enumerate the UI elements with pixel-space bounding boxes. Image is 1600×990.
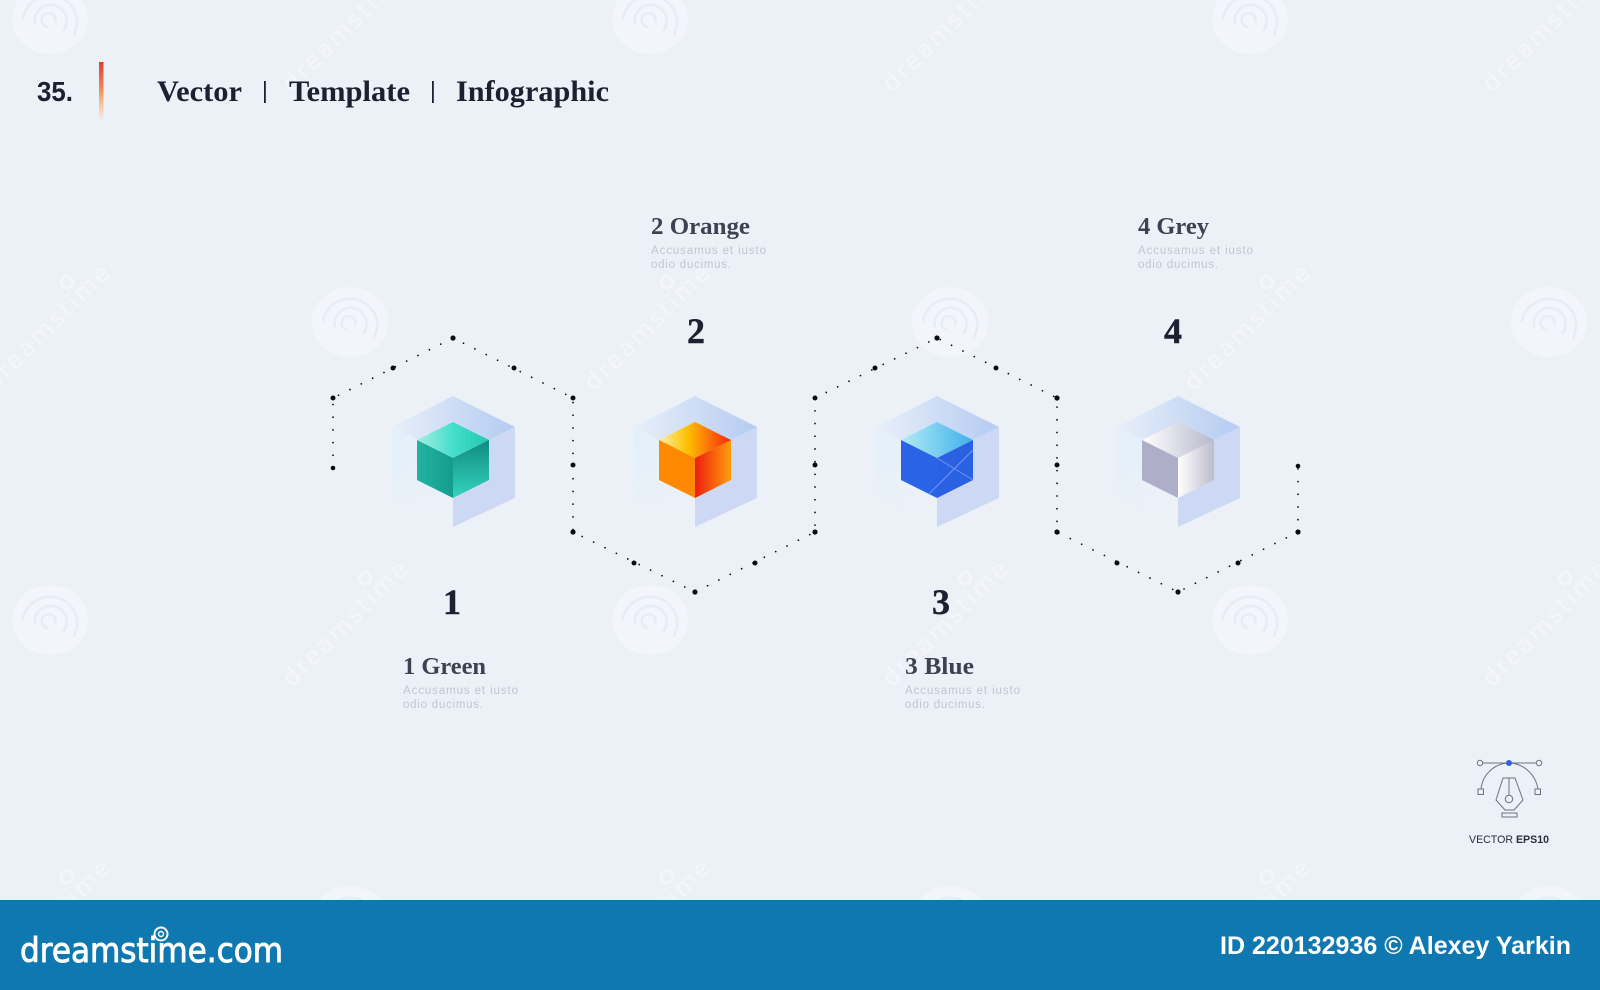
footer bar	[0, 900, 1600, 990]
label: 4 Grey: odio ducimus.	[1138, 259, 1218, 271]
icon: pen nib with bezier handles	[1477, 760, 1542, 817]
label: 4 Grey	[1138, 214, 1253, 271]
slide number: 35.	[37, 76, 73, 107]
watermark text: dreamstime	[276, 555, 414, 692]
footer logo: dreamstime.com	[20, 931, 283, 971]
number 3: 3	[932, 582, 950, 622]
number 1: 1	[443, 582, 461, 622]
footer credit: ID 220132936 © Alexey Yarkin	[1220, 932, 1571, 960]
step 1: green cube	[392, 396, 515, 527]
icon: vector pen tool badge	[1469, 760, 1549, 846]
label: 3 Blue: 3 Blue	[905, 654, 974, 680]
watermark text: dreamstime	[1178, 259, 1316, 396]
heading words	[157, 75, 609, 108]
label: 2 Orange: Accusamus et iusto	[651, 245, 766, 257]
heading words: Vector	[157, 75, 242, 108]
step 2: orange cube	[634, 396, 757, 527]
label: 3 Blue: odio ducimus.	[905, 699, 985, 711]
watermark text: dreamstime	[578, 259, 716, 396]
label: 2 Orange: 2 Orange	[651, 214, 750, 240]
icon caption: VECTOR EPS10	[1469, 834, 1549, 846]
watermark text: dreamstime	[578, 854, 716, 990]
label: 2 Orange	[651, 214, 766, 271]
dotted hexagon path	[330, 335, 1301, 595]
step 4: grey cube	[1117, 396, 1240, 527]
watermark text: dreamstime	[1178, 854, 1316, 990]
label: 4 Grey: 4 Grey	[1138, 214, 1209, 240]
number 2: 2	[687, 311, 705, 351]
label: 4 Grey: Accusamus et iusto	[1138, 245, 1253, 257]
label: 1 Green: Accusamus et iusto	[403, 685, 518, 697]
label: 1 Green	[403, 654, 518, 711]
label: 2 Orange: odio ducimus.	[651, 259, 731, 271]
label: 3 Blue: Accusamus et iusto	[905, 685, 1020, 697]
label: 3 Blue	[905, 654, 1020, 711]
step 3: blue cube	[876, 396, 999, 527]
heading words: Template	[289, 75, 410, 108]
label: 1 Green: odio ducimus.	[403, 699, 483, 711]
watermark text: dreamstime	[876, 555, 1014, 692]
label: 1 Green: 1 Green	[403, 654, 486, 680]
number 4: 4	[1164, 311, 1182, 351]
heading words: Infographic	[456, 75, 609, 108]
header title	[37, 62, 609, 119]
gradient accent bar	[99, 62, 104, 119]
